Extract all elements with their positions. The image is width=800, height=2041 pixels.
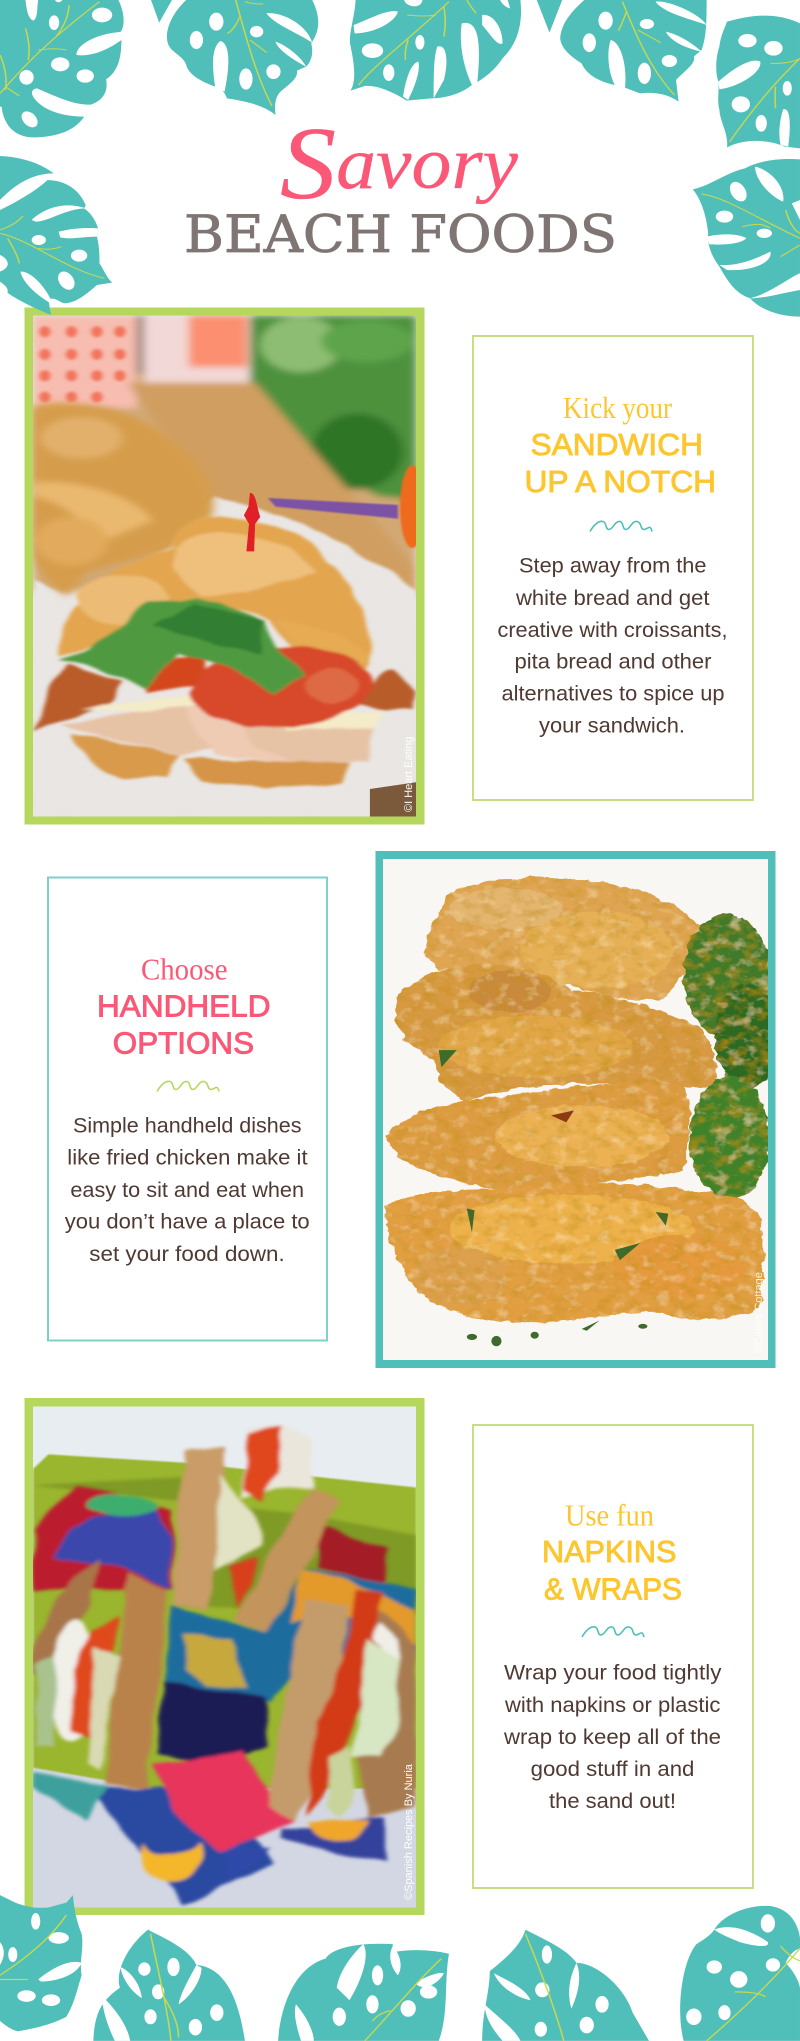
panel heading: OPTIONS	[113, 1026, 254, 1060]
icon: wave squiggle	[157, 1081, 219, 1092]
panel heading	[542, 1534, 682, 1607]
bottom leaf border	[0, 1895, 800, 2041]
panel body text: Wrap your food tightly	[504, 1662, 722, 1685]
text panel: napkins	[473, 1425, 753, 1888]
leaf: bottom first	[0, 1895, 82, 2031]
panel body text: with napkins or plastic	[504, 1694, 720, 1717]
panel heading	[97, 989, 270, 1060]
panel heading	[524, 427, 716, 499]
leaf: top fourth	[537, 0, 707, 102]
leaf: right side	[693, 159, 800, 317]
top leaf border	[0, 0, 800, 317]
panel body text	[498, 555, 728, 738]
panel body text: your sandwich.	[539, 714, 685, 738]
title slab line: BEACH FOODS	[184, 206, 617, 265]
icon: wave squiggle	[582, 1627, 644, 1637]
panel body text: wrap to keep all of the	[503, 1726, 721, 1749]
panel body text	[503, 1662, 722, 1813]
photo credit: Cakes Cottage: ©Cakes Cottage	[753, 1272, 765, 1353]
panel heading: UP A NOTCH	[524, 464, 716, 499]
panel body text: the sand out!	[549, 1790, 676, 1813]
panel body text: creative with croissants,	[498, 619, 728, 642]
panel heading: HANDHELD	[97, 989, 270, 1024]
panel heading: & WRAPS	[544, 1572, 682, 1607]
photo: fried chicken and broccoli	[385, 877, 781, 1346]
panel heading: SANDWICH	[530, 427, 703, 462]
panel heading: NAPKINS	[542, 1534, 676, 1569]
leaf: top right	[716, 16, 800, 148]
panel body text: Step away from the	[519, 555, 706, 578]
title script word: S	[280, 106, 336, 221]
text panel: sandwich	[473, 336, 753, 800]
panel body text: pita bread and other	[514, 650, 712, 674]
leaf: bottom second	[93, 1930, 245, 2041]
photo credit: I Heart Eating: ©I Heart Eating	[403, 737, 415, 812]
photo frame: wrapped sandwiches	[24, 1398, 424, 1915]
text panel: handheld	[48, 878, 327, 1340]
photo frame: sandwich	[24, 308, 424, 824]
leaf: bottom fourth	[482, 1930, 649, 2041]
photo: croissant sandwich	[33, 315, 424, 817]
leaf: top second	[151, 0, 318, 115]
panel body text: good stuff in and	[531, 1758, 694, 1781]
leaf: bottom right	[680, 1906, 800, 2041]
panel body text: like fried chicken make it	[67, 1146, 308, 1169]
panel body text: set your food down.	[89, 1243, 285, 1266]
panel intro: Choose	[141, 952, 228, 986]
panel intro: Kick your	[563, 390, 673, 425]
panel body text: you don’t have a place to	[65, 1210, 310, 1233]
leaf: left side	[0, 156, 112, 315]
panel body text	[65, 1115, 310, 1266]
leaf: top left	[0, 0, 124, 137]
title script word: avory	[336, 123, 518, 205]
panel body text: easy to sit and eat when	[70, 1179, 304, 1202]
icon: wave squiggle	[590, 521, 652, 532]
leaf: top third	[350, 0, 521, 101]
photo: napkin-wrapped sandwiches	[33, 1425, 416, 1909]
panel intro: Use fun	[565, 1498, 654, 1533]
panel body text: alternatives to spice up	[502, 682, 724, 706]
title	[184, 106, 617, 265]
panel body text: Simple handheld dishes	[73, 1115, 302, 1138]
photo credit: Spanish Recipes By Nuria: ©Spanish Recipes By Nuria	[403, 1763, 415, 1900]
leaf: bottom third	[278, 1944, 449, 2041]
photo frame: fried chicken	[376, 851, 781, 1368]
panel body text: white bread and get	[515, 587, 710, 610]
